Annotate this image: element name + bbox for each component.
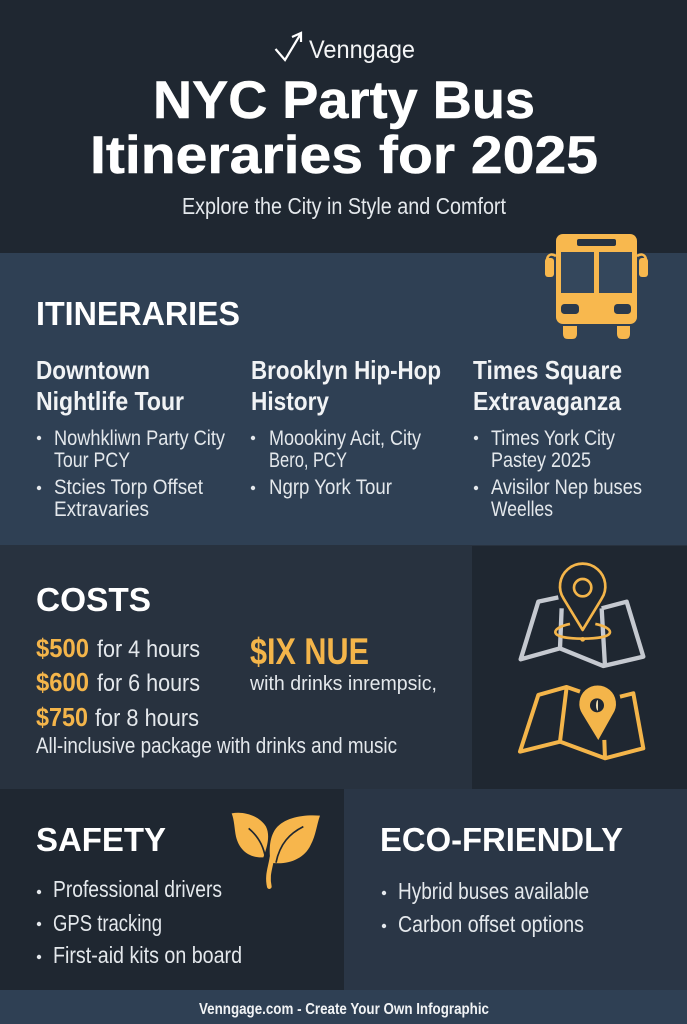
column: Times Square Extravaganza: Times Square [473,355,622,385]
cost list: $600 [36,667,89,697]
column: Brooklyn Hip-Hop History: Bero, PCY [269,449,347,472]
heading: eco-friendly: ECO-FRIENDLY [380,821,623,858]
column: Brooklyn Hip-Hop History [251,355,441,499]
column: Brooklyn Hip-Hop History: Brooklyn Hip-Hop [251,355,441,385]
column: Times Square Extravaganza: Weelles [491,498,553,521]
package note: All-inclusive package with drinks and music [36,733,397,758]
column: Brooklyn Hip-Hop History: History [251,386,329,416]
column: Times Square Extravaganza: Avisilor Nep buses [491,476,642,499]
safety list: GPS tracking [53,910,162,936]
icon: leaf sprout [232,813,320,887]
eco list: Hybrid buses available [398,878,589,904]
cost list: $750 [36,702,88,732]
heading: itineraries: ITINERARIES [36,295,240,332]
icon: bus [545,234,648,339]
icon: grey map with pin [521,564,643,666]
column: Downtown Nightlife Tour: Downtown [36,355,150,385]
subtitle: Explore the City in Style and Comfort [182,193,507,219]
column: Downtown Nightlife Tour: Stcies Torp Offset [54,476,203,499]
heading: costs: COSTS [36,581,151,618]
column: Downtown Nightlife Tour: Tour PCY [54,449,130,472]
panel: safety [0,789,344,990]
panel: eco-friendly [344,789,687,990]
eco list [382,878,589,937]
column: Downtown Nightlife Tour: Nowhkliwn Party City [54,427,225,450]
logo: Venngage: Venngage [309,36,415,64]
title: NYC Party Bus [153,71,535,130]
footer [0,990,687,1024]
panel: maps [472,546,687,789]
panel: header [0,0,687,253]
safety list [37,876,242,968]
title: Itineraries for 2025 [90,126,598,185]
eco list: Carbon offset options [398,911,584,937]
column: Brooklyn Hip-Hop History: Ngrp York Tour [269,476,392,499]
column: Times Square Extravaganza: Times York City [491,427,615,450]
cost list [36,633,200,732]
column: Times Square Extravaganza: Pastey 2025 [491,449,591,472]
cost list: $500 [36,633,89,663]
callout: price label: $IX NUE [250,631,369,672]
heading: safety: SAFETY [36,821,166,858]
callout: price label [249,631,437,695]
safety list: Professional drivers [53,876,222,902]
panel: costs [0,545,687,789]
column: Downtown Nightlife Tour: Nightlife Tour [36,386,184,416]
icon: gold map with pin [520,684,643,758]
footer: Venngage.com - Create Your Own Infographic [199,1001,489,1018]
cost list: for 4 hours [97,636,200,663]
column: Times Square Extravaganza: Extravaganza [473,386,621,416]
callout: price label: with drinks inrempsic, [249,673,437,695]
column: Downtown Nightlife Tour: Extravaries [54,498,149,521]
panel: itineraries [0,253,687,545]
title [90,71,598,185]
logo: Venngage [276,33,415,64]
column: Times Square Extravaganza [473,355,642,521]
cost list: for 8 hours [95,705,199,732]
column: Brooklyn Hip-Hop History: Moookiny Acit, City [269,427,421,450]
cost list: for 6 hours [97,670,200,697]
safety list: First-aid kits on board [53,942,242,968]
column: Downtown Nightlife Tour [36,355,225,521]
